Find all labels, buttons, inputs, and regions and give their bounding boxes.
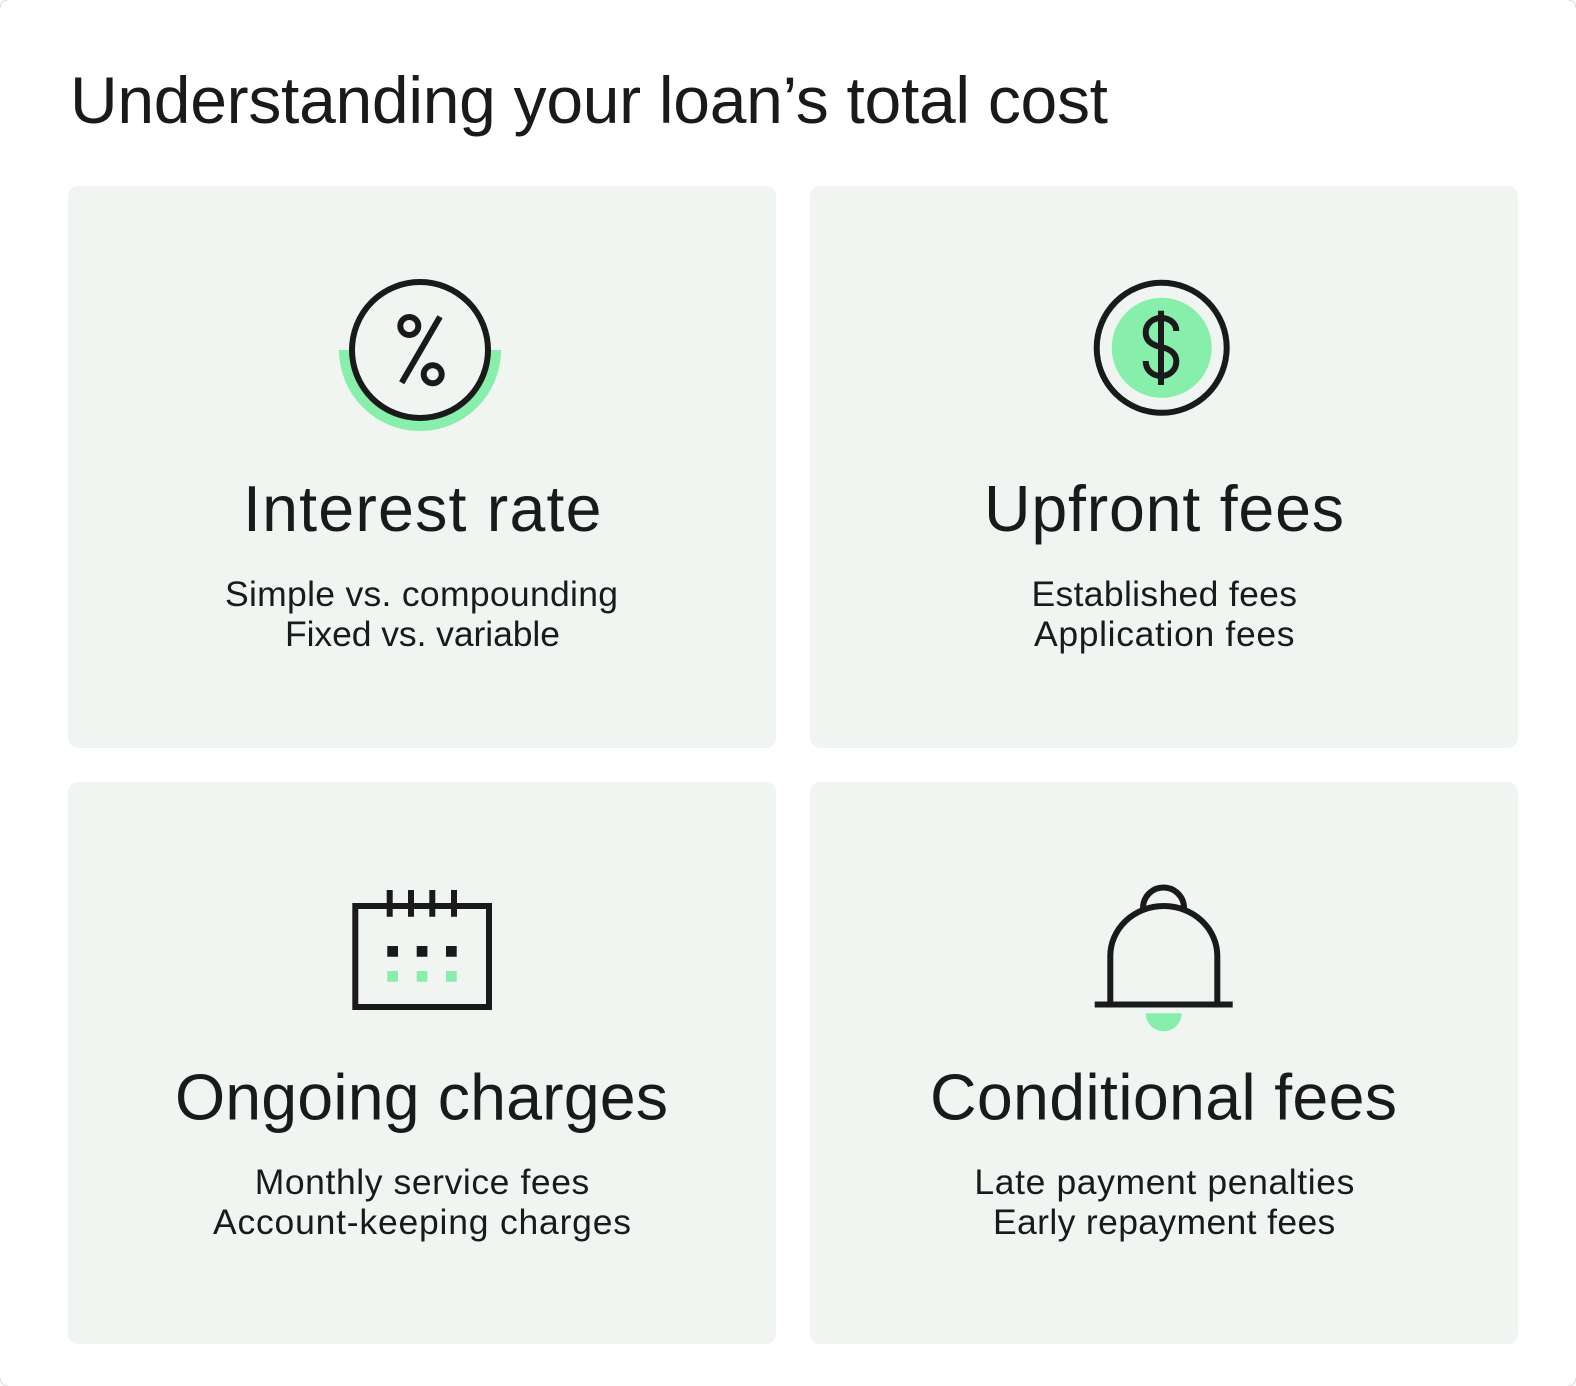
heading: upfront fees: Upfront fees xyxy=(984,473,1344,545)
text: ongoing charges details xyxy=(213,1162,631,1242)
text: interest rate details: Fixed vs. variable xyxy=(285,614,560,654)
text: ongoing charges details: Monthly service fees xyxy=(255,1162,589,1202)
icon: dollar coin xyxy=(1097,283,1227,413)
text: interest rate details: Simple vs. compounding xyxy=(225,574,618,614)
heading: interest rate: Interest rate xyxy=(243,473,602,545)
text: conditional fees details xyxy=(974,1162,1354,1242)
text: conditional fees details: Late payment penalties xyxy=(974,1162,1354,1202)
icon: percent circle xyxy=(339,282,501,431)
icon: calendar xyxy=(355,890,489,1007)
text: upfront fees details: Application fees xyxy=(1034,614,1294,654)
text: ongoing charges details: Account-keeping charges xyxy=(213,1202,631,1242)
heading: ongoing charges: Ongoing charges xyxy=(175,1062,668,1134)
panel: ongoing charges xyxy=(68,782,776,1344)
text: upfront fees details xyxy=(1032,574,1297,654)
title: Understanding your loan’s total cost xyxy=(70,63,1108,137)
panel: conditional fees xyxy=(810,782,1518,1344)
text: interest rate details xyxy=(225,574,618,654)
panel: interest rate xyxy=(68,186,776,748)
heading: conditional fees: Conditional fees xyxy=(930,1062,1397,1134)
panel: upfront fees xyxy=(810,186,1518,748)
icon: bell xyxy=(1095,888,1233,1031)
text: conditional fees details: Early repayment fees xyxy=(993,1202,1335,1242)
text: upfront fees details: Established fees xyxy=(1032,574,1297,614)
